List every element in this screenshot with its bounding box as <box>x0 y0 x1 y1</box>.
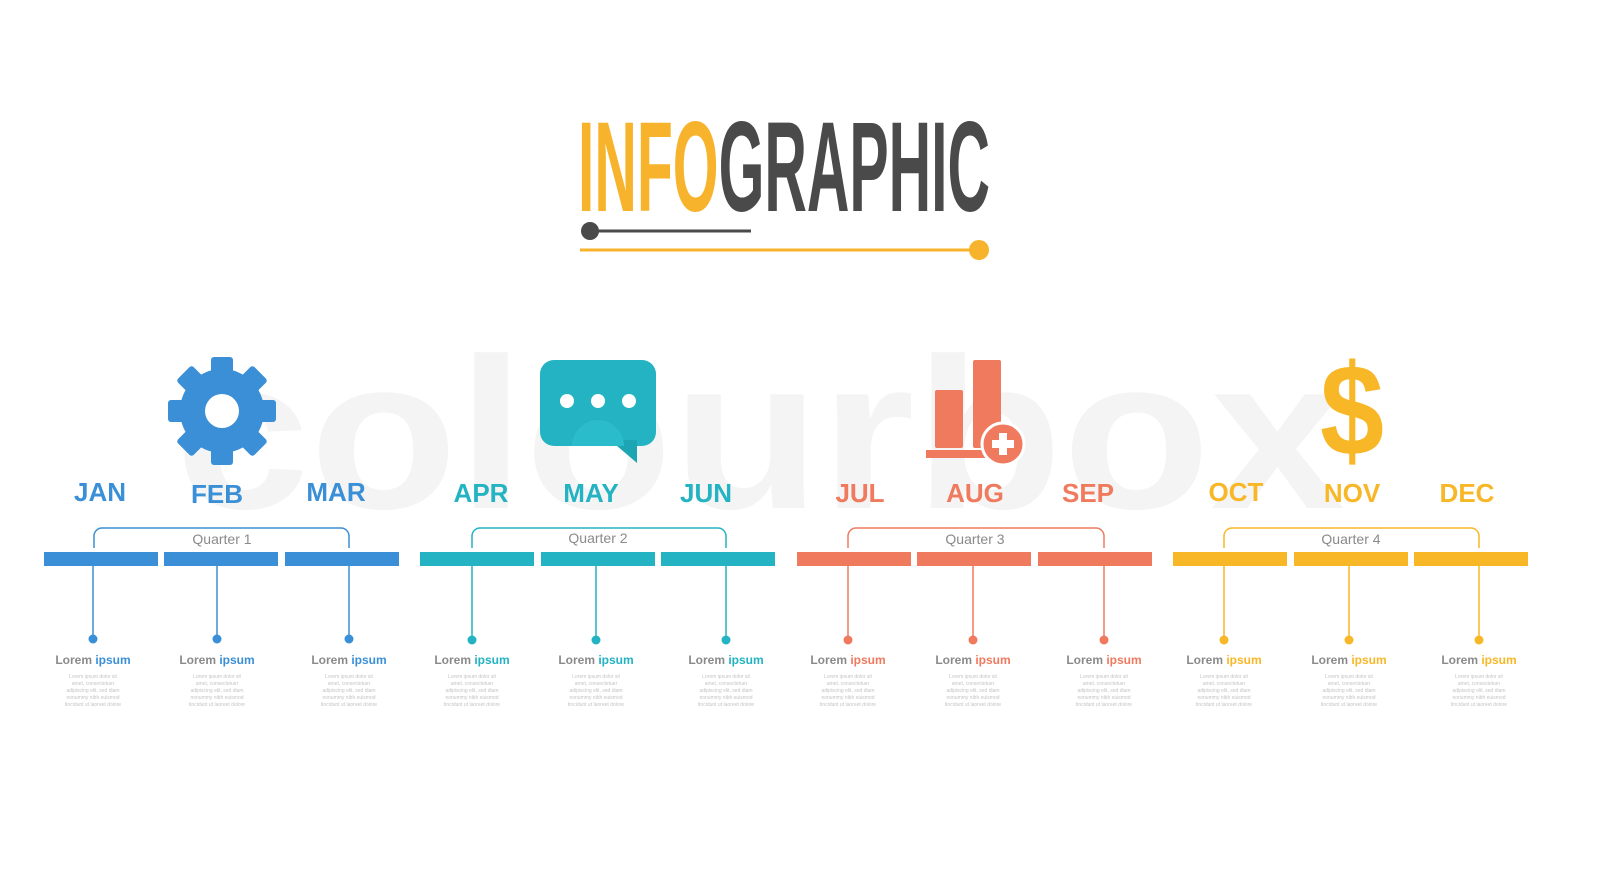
text blocks: lorem ipsum: Lorem ipsum <box>1186 653 1262 667</box>
text blocks: lorem ipsum: Lorem ipsum <box>1311 653 1387 667</box>
text blocks: lorem ipsum: Lorem ipsum <box>935 653 1011 667</box>
panel: quarter 2 <box>420 528 775 644</box>
text blocks: lorem ipsum: Lorem ipsum <box>688 653 764 667</box>
panel: quarter 4 <box>1173 528 1528 644</box>
text blocks: lorem ipsum: Lorem ipsum <box>1441 653 1517 667</box>
panel: quarter 3: Quarter 3 <box>945 531 1005 547</box>
month labels: APR <box>454 478 509 508</box>
icon: dollar: $ <box>1320 337 1384 483</box>
text blocks: lorem ipsum <box>55 653 1517 667</box>
panel: quarter 1 <box>44 528 399 644</box>
panel: quarter 1: Quarter 1 <box>192 531 252 547</box>
icon: gear <box>168 357 276 465</box>
text blocks: lorem ipsum: Lorem ipsum <box>558 653 634 667</box>
month labels <box>74 477 1495 509</box>
title <box>578 96 990 260</box>
panel: quarter 4: Quarter 4 <box>1321 531 1381 547</box>
icon: bar chart plus <box>926 360 1024 465</box>
icon: chat bubble <box>540 360 656 463</box>
text blocks: lorem ipsum: Lorem ipsum <box>1066 653 1142 667</box>
watermark: colourbox <box>175 313 1345 554</box>
month labels: NOV <box>1324 478 1381 508</box>
month labels: SEP <box>1062 478 1114 508</box>
month labels: JUL <box>835 478 885 508</box>
month labels: JUN <box>680 478 732 508</box>
title: INFOGRAPHIC <box>578 96 990 239</box>
month labels: AUG <box>946 478 1004 508</box>
text blocks: body copy <box>65 674 1507 708</box>
month labels: MAY <box>563 478 619 508</box>
text blocks: lorem ipsum: Lorem ipsum <box>810 653 886 667</box>
month labels: FEB <box>191 479 243 509</box>
month labels: MAR <box>306 477 366 507</box>
month labels: JAN <box>74 477 126 507</box>
month labels: DEC <box>1440 478 1495 508</box>
panel: quarter 2: Quarter 2 <box>568 530 628 546</box>
panel: quarter 3 <box>797 528 1152 644</box>
text blocks: lorem ipsum: Lorem ipsum <box>179 653 255 667</box>
text blocks: lorem ipsum: Lorem ipsum <box>55 653 131 667</box>
month labels: OCT <box>1209 477 1264 507</box>
text blocks: lorem ipsum: Lorem ipsum <box>311 653 387 667</box>
text blocks: lorem ipsum: Lorem ipsum <box>434 653 510 667</box>
